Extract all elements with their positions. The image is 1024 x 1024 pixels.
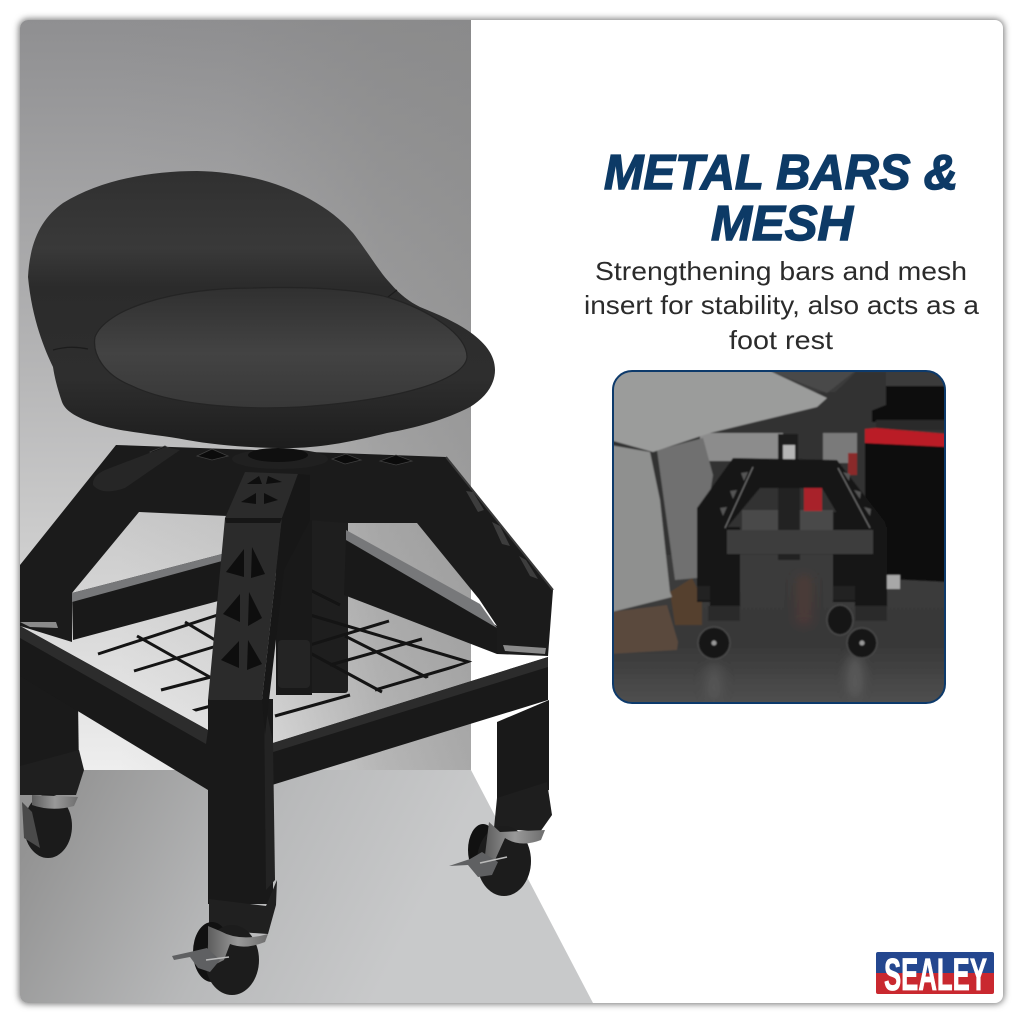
body text: Strengthening bars and mesh bbox=[595, 256, 967, 286]
seat cushion bbox=[95, 287, 467, 408]
body text: insert for stability, also acts as a bbox=[584, 290, 980, 320]
rear frame bars bbox=[72, 530, 497, 654]
front shoe bbox=[610, 605, 678, 654]
panel: in-use photo bbox=[610, 368, 948, 706]
stool cross bar bbox=[727, 530, 873, 554]
wire mesh bbox=[98, 590, 472, 716]
wall backdrop bbox=[20, 20, 471, 770]
body text bbox=[584, 256, 980, 355]
strut perforations bbox=[221, 476, 282, 670]
seat post bbox=[778, 434, 800, 560]
height adjust lever bbox=[93, 447, 180, 491]
arm perforations bbox=[720, 472, 871, 516]
panel: product image bbox=[20, 20, 593, 1003]
front strut bbox=[208, 472, 298, 732]
frame welds bbox=[20, 622, 546, 654]
caster hubs bbox=[712, 640, 864, 646]
back right leg bbox=[449, 700, 552, 896]
front trouser leg bbox=[610, 445, 672, 612]
thigh bbox=[610, 371, 827, 452]
red tool chest bbox=[804, 386, 948, 589]
stool arms bbox=[697, 458, 887, 530]
body text: foot rest bbox=[729, 325, 834, 355]
back shoe bbox=[670, 578, 702, 625]
photo background bbox=[614, 372, 944, 556]
seat bbox=[837, 372, 887, 411]
heading: MESH bbox=[711, 197, 855, 251]
heading: METAL BARS & bbox=[604, 146, 958, 200]
photo border bbox=[613, 371, 945, 703]
back support column bbox=[312, 520, 348, 693]
front caster bbox=[172, 922, 268, 995]
front stool legs bbox=[708, 527, 887, 621]
seat stitching bbox=[53, 290, 397, 350]
rear stool legs bbox=[697, 512, 855, 602]
floor bbox=[20, 770, 593, 1003]
top plate perforations bbox=[150, 446, 412, 465]
seat backrest and base bbox=[28, 171, 495, 448]
back left leg bbox=[20, 660, 84, 858]
arched top frame bbox=[20, 445, 553, 656]
back trouser leg bbox=[657, 438, 713, 580]
shirt bbox=[774, 372, 853, 393]
arm highlights bbox=[725, 467, 870, 528]
heading bbox=[604, 146, 958, 251]
right arm edge and perforations bbox=[446, 457, 553, 590]
floor reflections bbox=[704, 575, 864, 700]
stool bbox=[20, 171, 553, 995]
front leg bbox=[208, 699, 277, 934]
front frame bars bbox=[20, 626, 548, 790]
swivel hub bbox=[248, 448, 316, 462]
gas lift column bbox=[276, 500, 312, 695]
casters bbox=[698, 605, 877, 659]
floor bbox=[610, 555, 948, 706]
